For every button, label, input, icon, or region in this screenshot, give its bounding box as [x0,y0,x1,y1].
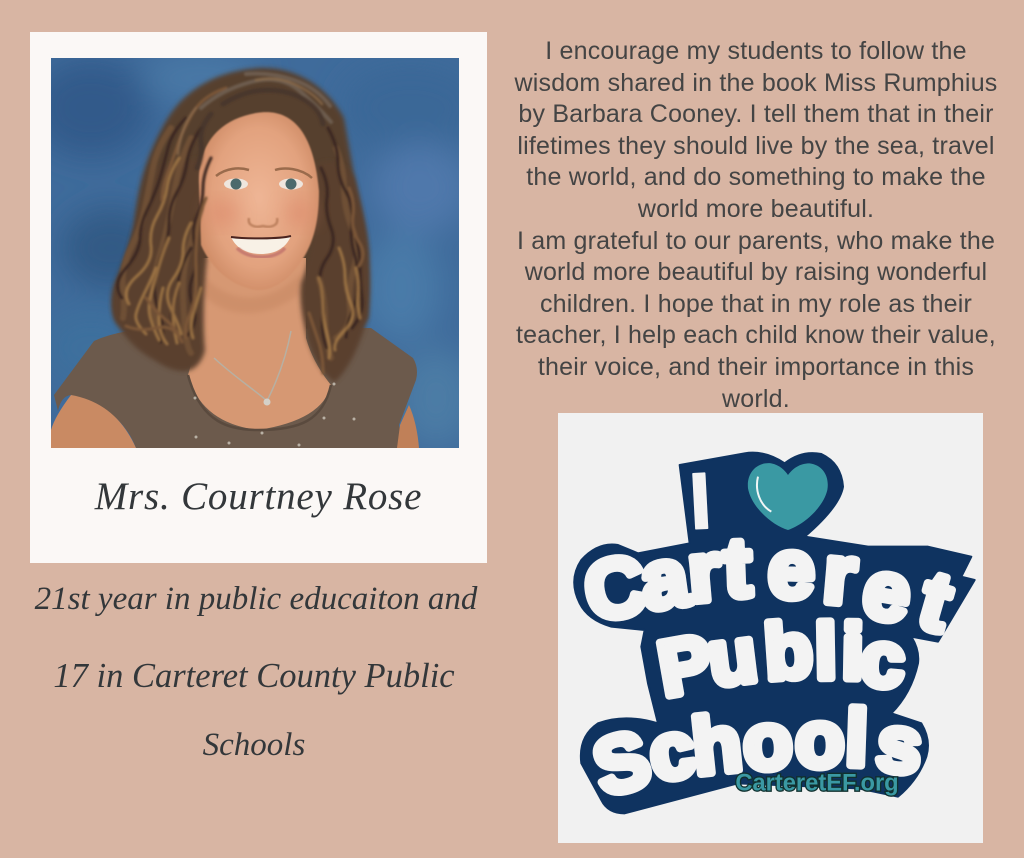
right lower hair over shoulder [300,161,370,382]
polaroid photo card [30,32,487,563]
heart icon [748,463,828,530]
logo wordmark: Schools [584,693,926,813]
logo wordmark [578,456,962,813]
shirt [54,328,417,448]
teacher statement text block: I encourage my students to follow the [545,37,967,65]
face [199,112,319,290]
years of service note [34,581,478,763]
heart highlight [757,477,771,512]
name caption: Mrs. Courtney Rose [95,475,422,518]
left lower hair over shoulder [109,214,210,374]
teacher statement text block: I am grateful to our parents, who make the [517,227,995,255]
teacher statement text block [514,37,998,413]
cheeks [212,200,320,225]
years of service note: 21st year in public educaiton and [35,581,477,617]
logo backing shape [574,453,975,813]
smile [231,236,291,254]
teacher statement text block: the world, and do something to make the [526,163,986,191]
teacher statement text block: world more beautiful. [638,195,874,223]
logo wordmark: Public [652,605,907,713]
shirt neckline and beads [188,375,331,430]
teacher statement text block: teacher, I help each child know their value, [516,321,996,349]
years of service note: Schools [203,727,305,763]
hair back [112,68,368,358]
right arm [397,405,419,448]
eyes [216,168,312,190]
teacher statement text block: children. I hope that in my role as their [540,290,972,318]
teacher statement text block: by Barbara Cooney. I tell them that in their [518,100,994,128]
years of service note: 17 in Carteret County Public [53,657,455,695]
teacher statement text block: wisdom shared in the book Miss Rumphius [514,69,998,97]
logo wordmark: Carteret [578,521,962,650]
logo wordmark: I [687,456,714,546]
hair strands [118,74,363,373]
teacher statement text block: world more beautiful by raising wonderful [525,258,987,286]
teacher statement text block: their voice, and their importance in this [538,353,974,381]
left arm [51,395,136,448]
portrait photo [51,58,459,448]
nose [249,218,277,227]
necklace [214,331,291,401]
website label: CarteretEF.org [735,770,899,797]
neck and chest [188,258,331,430]
teacher statement text block: world. [722,385,790,413]
logo panel: I love Carteret Public Schools [558,413,983,843]
teacher statement text block: lifetimes they should live by the sea, travel [517,132,995,160]
